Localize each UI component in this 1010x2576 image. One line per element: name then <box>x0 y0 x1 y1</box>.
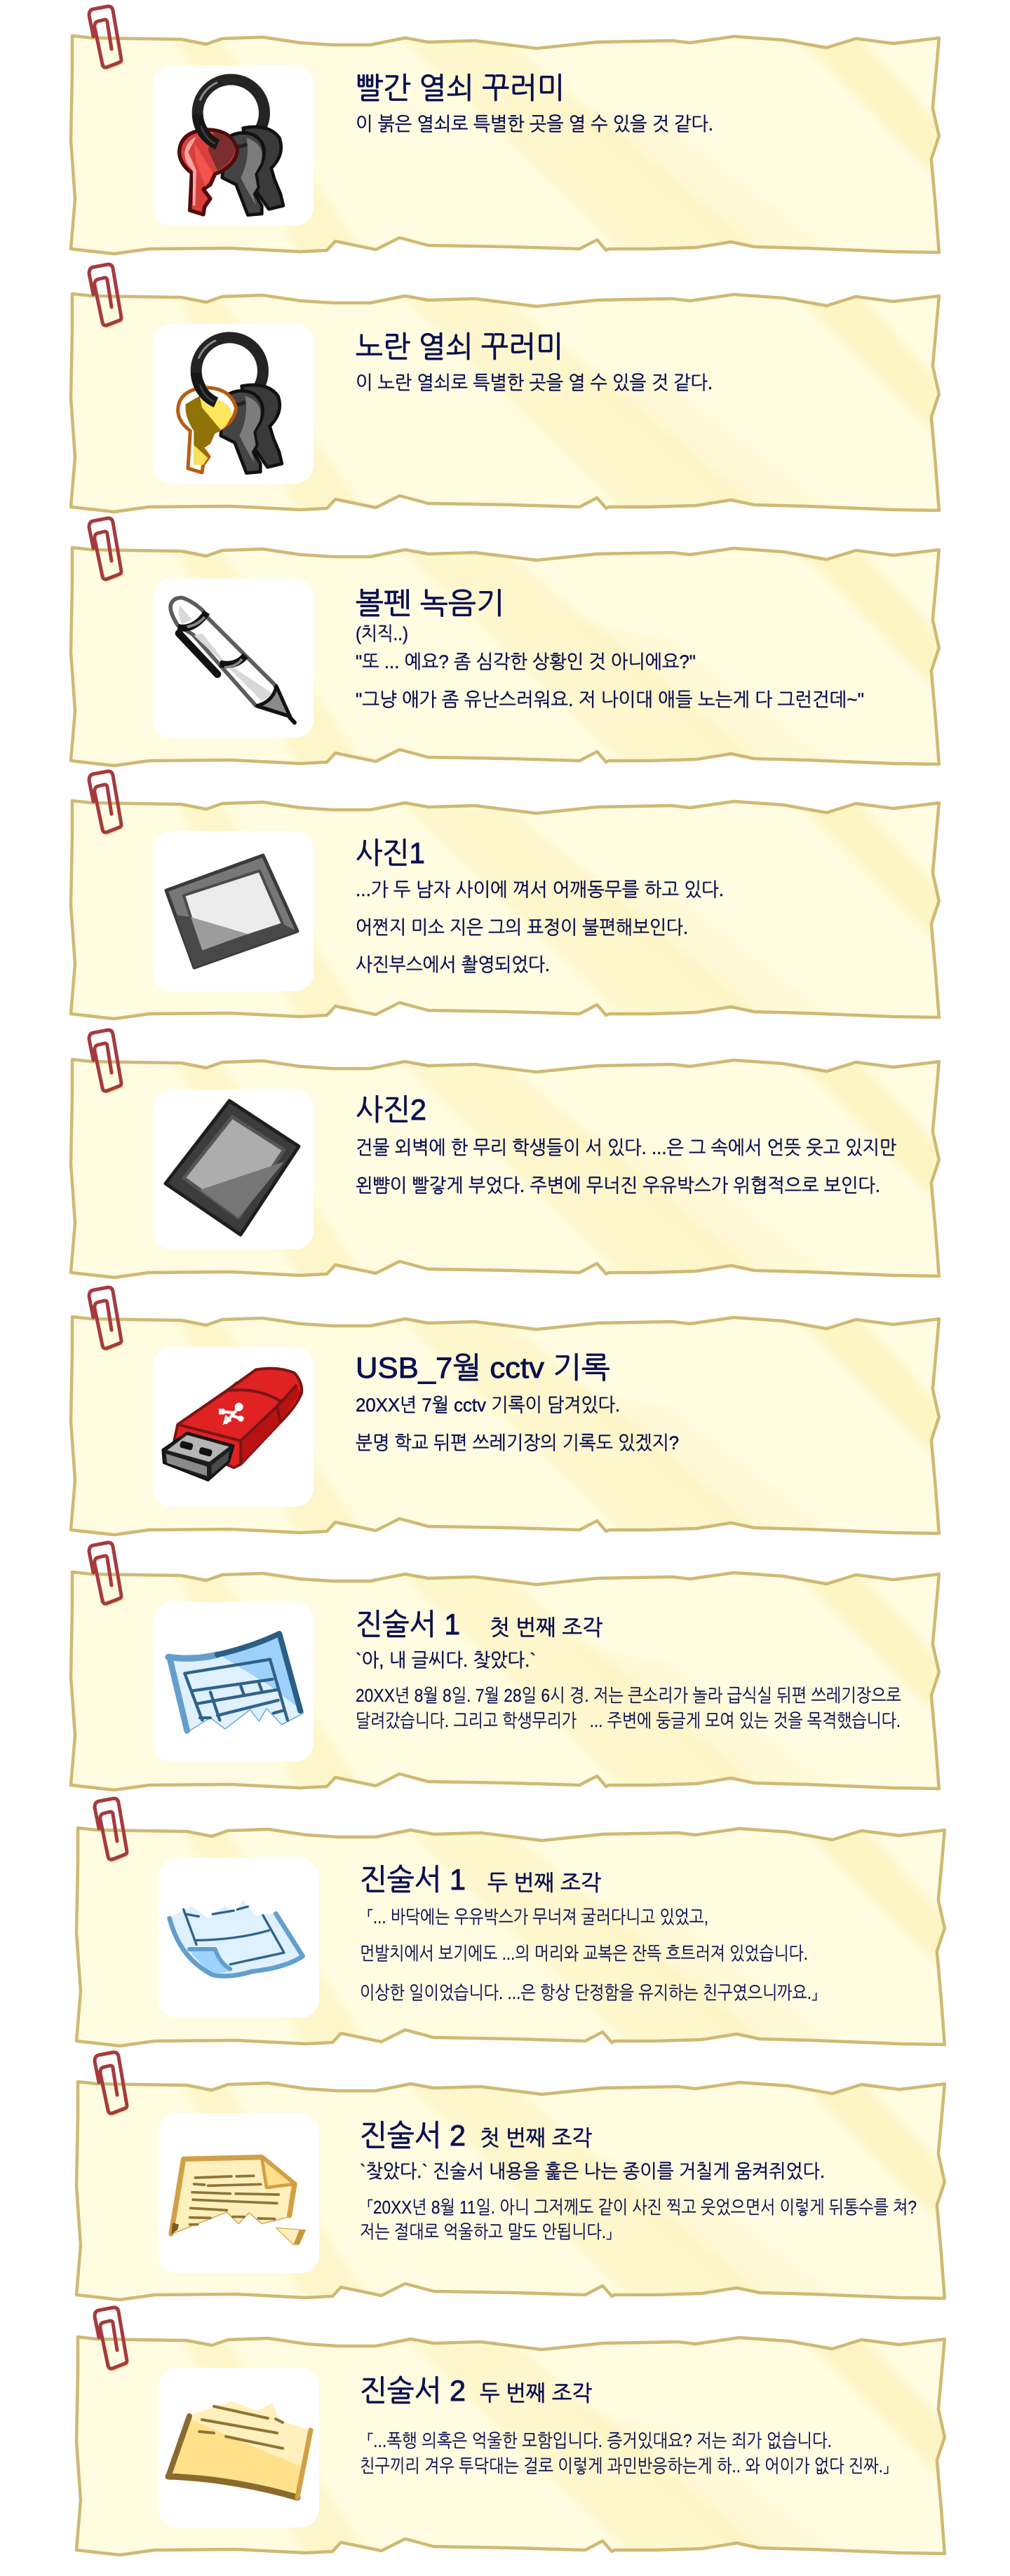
icon: pen <box>170 598 295 723</box>
image frame <box>153 578 314 738</box>
statement text: 달려갔습니다. 그리고 학생무리가 ... 주변에 둥글게 모여 있는 것을 목격했습니다. <box>356 1710 901 1731</box>
image frame <box>153 1090 314 1249</box>
icon: photo 1 <box>166 855 297 968</box>
paper sheet <box>71 1317 943 1538</box>
heading: 진술서 2 <box>360 2119 466 2152</box>
panel: USB <box>71 1287 943 1538</box>
panel: photo 2 <box>71 1030 943 1281</box>
heading: 두 번째 조각 <box>487 1871 601 1895</box>
heading: 사진1 <box>356 836 425 869</box>
description: 사진부스에서 촬영되었다. <box>356 954 550 975</box>
paper sheet <box>71 548 943 769</box>
paper clip <box>95 1798 128 1862</box>
image frame <box>153 65 314 226</box>
icon: torn yellow document piece <box>167 2401 311 2497</box>
icon: yellow key ring <box>178 337 282 473</box>
heading: 진술서 1 <box>356 1608 460 1641</box>
heading: USB_7월 cctv 기록 <box>356 1351 610 1384</box>
paper clip <box>95 2307 128 2371</box>
statement text: 「... 바닥에는 우유박스가 무너져 굴러다니고 있었고, <box>368 1906 708 1927</box>
description <box>356 1137 896 1196</box>
heading: 노란 열쇠 꾸러미 <box>356 330 563 363</box>
panel: photo 1 <box>71 771 943 1022</box>
statement text: 친구끼리 겨우 투닥대는 걸로 이렇게 과민반응하는게 하.. 와 어이가 없다 진짜.」 <box>360 2455 889 2476</box>
panel: statement 1 second piece <box>76 1798 948 2049</box>
description: 분명 학교 뒤편 쓰레기장의 기록도 있겠지? <box>356 1432 679 1453</box>
paper clip <box>89 518 123 581</box>
image frame <box>159 1858 319 2018</box>
heading: 사진2 <box>356 1093 426 1126</box>
paper clip <box>89 6 123 69</box>
heading: 진술서 1 <box>360 1863 466 1896</box>
paper sheet <box>76 2337 948 2558</box>
recording text: "그냥 애가 좀 유난스러워요. 저 나이대 애들 노는게 다 그런건데~" <box>356 689 864 710</box>
description: ...가 두 남자 사이에 껴서 어깨동무를 하고 있다. <box>356 879 724 900</box>
heading <box>360 1863 601 1896</box>
panel: statement 2 second piece <box>76 2307 948 2558</box>
icon: torn blue document curl <box>168 1900 305 1977</box>
statement text <box>360 1906 817 2003</box>
statement text: 먼발치에서 보기에도 ...의 머리와 교복은 잔뜩 흐트러져 있었습니다. <box>360 1943 808 1964</box>
description <box>356 1395 679 1453</box>
heading <box>360 2119 592 2152</box>
image frame <box>153 1347 314 1507</box>
paper sheet <box>76 2082 948 2303</box>
icon: torn blue document <box>167 1632 304 1733</box>
paper clip <box>89 1543 123 1606</box>
description: 이 노란 열쇠로 특별한 곳을 열 수 있을 것 같다. <box>356 372 713 393</box>
image frame <box>153 324 314 484</box>
paper clip <box>89 1030 123 1093</box>
statement text: 20XX년 8월 8일. 7월 28일 6시 경. 저는 큰소리가 놀라 급식실 뒤편 쓰레기장으로 <box>356 1685 901 1706</box>
paper sheet <box>71 36 943 257</box>
statement text <box>356 1685 901 1731</box>
statement text: 「...폭행 의혹은 억울한 모함입니다. 증거있대요? 저는 죄가 없습니다. <box>368 2430 832 2451</box>
paper clip <box>95 2052 128 2115</box>
statement text <box>360 2197 917 2242</box>
image frame <box>153 831 314 991</box>
panel: red key ring <box>71 6 943 257</box>
heading <box>360 2374 592 2407</box>
statement text <box>360 2430 889 2476</box>
paper sheet <box>71 1059 943 1281</box>
icon: USB stick <box>163 1369 302 1481</box>
heading: 볼펜 녹음기 <box>356 587 504 620</box>
paper sheet <box>76 1828 948 2049</box>
paper clip <box>89 771 123 834</box>
statement text: 저는 절대로 억울하고 말도 안됩니다.」 <box>360 2221 612 2242</box>
panel: statement 2 first piece <box>76 2052 948 2303</box>
icon: photo 2 <box>166 1101 299 1235</box>
description: 이 붉은 열쇠로 특별한 곳을 열 수 있을 것 같다. <box>356 114 713 135</box>
recording text <box>356 623 864 710</box>
paper clip <box>89 1287 123 1350</box>
icon: torn yellow document <box>171 2156 306 2245</box>
heading: 첫 번째 조각 <box>490 1615 602 1640</box>
heading: 첫 번째 조각 <box>480 2126 592 2150</box>
description <box>356 879 724 975</box>
statement text: 이상한 일이었습니다. ...은 항상 단정함을 유지하는 친구였으니까요.」 <box>360 1982 817 2003</box>
paper sheet <box>71 801 943 1022</box>
description: `찾았다.` 진술서 내용을 훑은 나는 종이를 거칠게 움켜쥐었다. <box>360 2161 825 2182</box>
recording text: (치직..) <box>356 623 408 644</box>
image frame <box>159 2113 319 2273</box>
paper sheet <box>71 294 943 515</box>
description: 왼뺨이 빨갛게 부었다. 주변에 무너진 우유박스가 위협적으로 보인다. <box>356 1175 880 1196</box>
recording text: "또 ... 예요? 좀 심각한 상황인 것 아니에요?" <box>356 651 696 672</box>
paper clip <box>89 264 123 327</box>
icon: red key ring <box>180 79 283 215</box>
description: 어쩐지 미소 지은 그의 표정이 불편해보인다. <box>356 917 688 938</box>
heading: 빨간 열쇠 꾸러미 <box>356 72 565 104</box>
heading: 두 번째 조각 <box>480 2381 592 2406</box>
panel: ballpoint recorder <box>71 518 943 769</box>
description: `아, 내 글씨다. 찾았다.` <box>356 1650 536 1671</box>
image frame <box>153 1602 314 1762</box>
panel: statement 1 first piece <box>71 1543 943 1794</box>
description: 건물 외벽에 한 무리 학생들이 서 있다. ...은 그 속에서 언뜻 웃고 있지만 <box>356 1137 896 1158</box>
statement text: 「20XX년 8월 11일. 아니 그저께도 같이 사진 찍고 웃었으면서 이렇게 뒤통수를 쳐? <box>368 2197 917 2218</box>
image frame <box>159 2368 319 2528</box>
panel: yellow key ring <box>71 264 943 515</box>
paper sheet <box>71 1572 943 1794</box>
description: 20XX년 7월 cctv 기록이 담겨있다. <box>356 1395 620 1416</box>
heading: 진술서 2 <box>360 2374 466 2407</box>
heading <box>356 1608 602 1641</box>
